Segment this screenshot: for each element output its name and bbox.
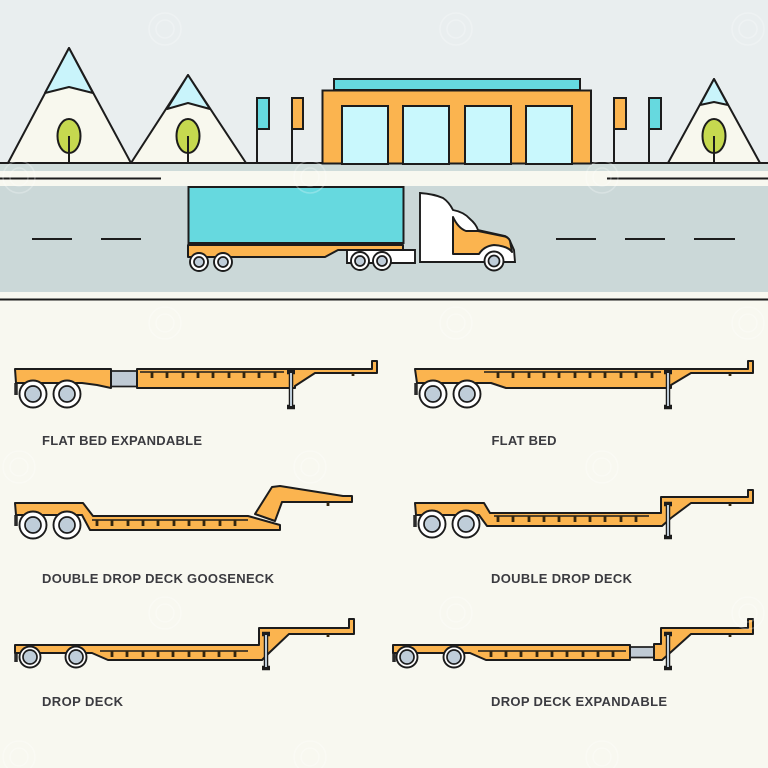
deck slats	[478, 650, 626, 652]
mountain middle with tree	[131, 75, 246, 164]
mountain right with tree	[668, 79, 760, 164]
wheels	[20, 380, 46, 408]
trailer: flat bed	[415, 361, 753, 408]
deck slats	[100, 650, 248, 652]
grey extension	[630, 647, 654, 658]
wheels	[20, 646, 40, 668]
background: lower cream panel	[0, 164, 768, 768]
lane dashes	[32, 238, 735, 240]
ground line	[0, 162, 768, 164]
label: double drop deck: DOUBLE DROP DECK	[491, 571, 633, 586]
road	[0, 186, 768, 292]
deck	[415, 361, 753, 388]
trailer: drop deck expandable	[393, 619, 753, 668]
support leg	[262, 634, 270, 668]
rear section	[15, 369, 111, 388]
label: drop deck: DROP DECK	[42, 694, 124, 709]
support leg	[287, 372, 295, 407]
deck slats	[140, 371, 284, 373]
truck fifth wheel	[347, 250, 415, 263]
rear deck	[393, 645, 630, 660]
wheels	[418, 510, 446, 538]
support leg	[664, 372, 672, 407]
road bottom line	[0, 298, 768, 300]
mountain left with tree	[8, 48, 131, 164]
label: flat bed: FLAT BED	[492, 433, 556, 448]
gooseneck	[255, 486, 352, 521]
trailer: drop deck	[15, 619, 354, 668]
truck trailer deck	[188, 245, 403, 257]
truck hood	[453, 217, 512, 254]
wheels	[420, 380, 446, 408]
trailer: double drop deck	[415, 490, 753, 538]
label: drop deck expandable: DROP DECK EXPANDABLE	[491, 694, 667, 709]
ground strip	[0, 164, 768, 171]
wheels	[396, 646, 418, 668]
deck	[415, 490, 753, 526]
trailer: double drop deck gooseneck	[15, 486, 352, 538]
truck trailer wheels	[190, 252, 391, 271]
label: flat bed expandable: FLAT BED EXPANDABLE	[42, 433, 202, 448]
roadside lines	[0, 178, 768, 180]
deck	[15, 503, 280, 530]
building	[322, 79, 591, 164]
truck	[188, 187, 515, 271]
label: double drop deck gooseneck: DOUBLE DROP DECK GOOSENECK	[42, 571, 275, 586]
flags right	[614, 98, 661, 163]
trailer: flat bed expandable	[15, 361, 377, 408]
support leg	[664, 634, 672, 668]
support leg	[664, 504, 672, 537]
truck trailer box	[188, 187, 404, 243]
deck slats	[484, 371, 661, 373]
front section	[654, 619, 753, 660]
main deck	[137, 361, 377, 388]
deck	[15, 619, 354, 660]
deck slats	[494, 515, 649, 517]
background: sky	[0, 0, 768, 164]
flags left	[257, 98, 303, 163]
grey extension	[111, 371, 137, 386]
wheels	[20, 512, 46, 538]
rear bar	[14, 383, 18, 395]
truck cab wheel	[484, 252, 504, 270]
truck cab	[420, 193, 515, 262]
deck slats	[92, 519, 248, 521]
